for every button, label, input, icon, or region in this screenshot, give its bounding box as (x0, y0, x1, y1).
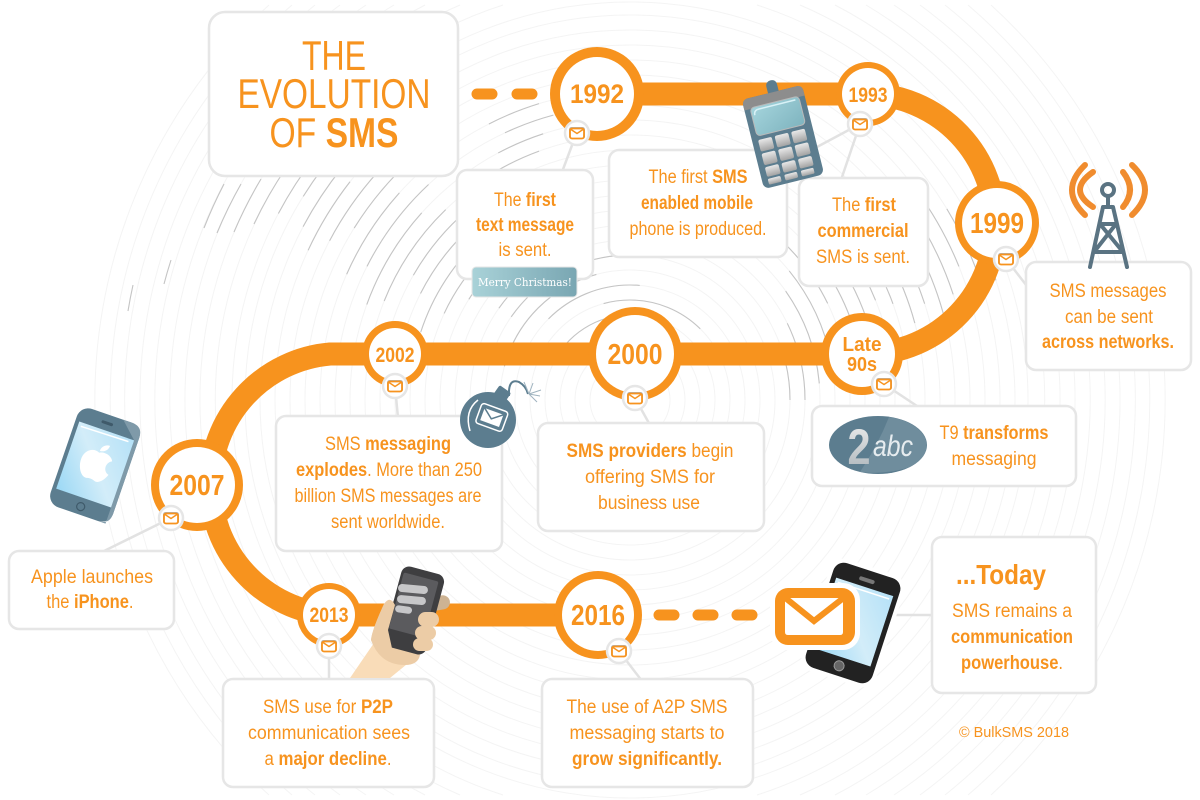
panel: today: powerhouse. (961, 653, 1063, 674)
panel: across networks: SMS messages (1050, 281, 1166, 302)
panel: first text message: is sent. (498, 240, 552, 261)
panel: SMS providers: SMS providers begin (566, 441, 734, 462)
node: 2013 (297, 583, 361, 658)
panel: A2P growth: grow significantly. (572, 749, 722, 770)
panel: SMS explodes (276, 416, 502, 551)
background: darker broken arcs (128, 2, 1032, 798)
panel: A2P growth: The use of A2P SMS (566, 697, 728, 718)
title: EVOLUTION (238, 70, 430, 117)
panel: first commercial SMS: The first (832, 195, 897, 216)
icon: 2abc key: abc (873, 430, 913, 463)
copyright: © BulkSMS 2018 (959, 724, 1069, 741)
panel: T9 (812, 406, 1076, 486)
panel: P2P decline: communication sees (248, 723, 410, 744)
panel: today (932, 537, 1096, 693)
panel: SMS explodes: billion SMS messages are (294, 486, 482, 507)
panel: across networks (1026, 262, 1191, 370)
panel: A2P growth (542, 679, 753, 787)
node: 2016 (554, 571, 642, 663)
panel: today: communication (951, 627, 1073, 648)
node: 1999 (955, 181, 1039, 271)
panel: first text message: text message (476, 215, 574, 236)
icon: iPhone (47, 405, 143, 525)
panel: first text message (457, 170, 593, 297)
icon: 2abc key (829, 416, 927, 475)
timeline road (210, 94, 995, 615)
panel: first SMS enabled phone: enabled mobile (641, 193, 753, 214)
node: 2007 (151, 439, 243, 531)
panel: today: SMS remains a (952, 601, 1072, 622)
panel: P2P decline (223, 679, 434, 787)
node: 1992 (550, 47, 644, 145)
node: 2000: 2000 (608, 339, 662, 371)
panel: first commercial SMS: commercial (818, 221, 908, 242)
panel: Apple iPhone (9, 551, 174, 629)
connector lines (100, 124, 1030, 681)
title (238, 32, 430, 156)
node: 1999: 1999 (970, 208, 1024, 240)
panel: first SMS enabled phone: The first SMS (648, 167, 748, 188)
icon: hand holding phone (350, 565, 451, 678)
node: 2002 (362, 321, 428, 398)
icon: bomb (460, 381, 541, 448)
node: 2000 (588, 307, 682, 410)
node: 1993: 1993 (848, 84, 888, 107)
panel: SMS providers: offering SMS for (585, 467, 716, 488)
panel: SMS explodes: sent worldwide. (331, 512, 445, 533)
panel: P2P decline: SMS use for P2P (263, 697, 393, 718)
panel: first commercial SMS (799, 178, 928, 286)
icon: 2abc key: 2 (848, 419, 870, 475)
panel: A2P growth: messaging starts to (570, 723, 724, 744)
title panel (209, 12, 458, 176)
node: 1992: 1992 (570, 79, 624, 109)
panel: SMS providers: business use (598, 493, 700, 514)
panel: Apple iPhone: the iPhone. (46, 592, 134, 613)
panel: SMS explodes: SMS messaging (325, 434, 451, 455)
panel: SMS explodes: explodes. More than 250 (296, 460, 482, 481)
node: Late 90s: 90s (847, 354, 877, 376)
panel: first text message: The first (494, 190, 557, 211)
title: OF SMS (270, 109, 398, 156)
icon: apple logo (76, 438, 118, 485)
panel: Apple iPhone: Apple launches (31, 567, 153, 588)
node: 2016: 2016 (571, 600, 625, 632)
panel: SMS providers (538, 423, 764, 531)
panel: T9: T9 transforms (940, 423, 1048, 444)
title: THE (302, 32, 366, 79)
node: 2002: 2002 (376, 344, 414, 367)
merry christmas tag: Merry Christmas! (478, 276, 572, 289)
node: 2007: 2007 (170, 470, 224, 502)
icon: smartphone with envelope (770, 555, 908, 691)
panel: across networks: can be sent (1065, 307, 1154, 328)
panel: P2P decline: a major decline. (264, 749, 392, 770)
node: 1993 (836, 62, 900, 136)
node: Late 90s: Late (842, 334, 882, 356)
panel: first SMS enabled phone (609, 150, 787, 257)
panel: T9: messaging (952, 449, 1036, 470)
panel: first SMS enabled phone: phone is produced. (630, 219, 766, 240)
icon: 1993 mobile phone (739, 73, 824, 189)
node: Late 90s (821, 313, 903, 396)
panel: first commercial SMS: SMS is sent. (816, 247, 910, 268)
panel: across networks: across networks. (1042, 332, 1174, 353)
icon: radio tower (1072, 165, 1145, 267)
node: 2013: 2013 (310, 604, 348, 627)
panel: today: ...Today (956, 559, 1046, 590)
